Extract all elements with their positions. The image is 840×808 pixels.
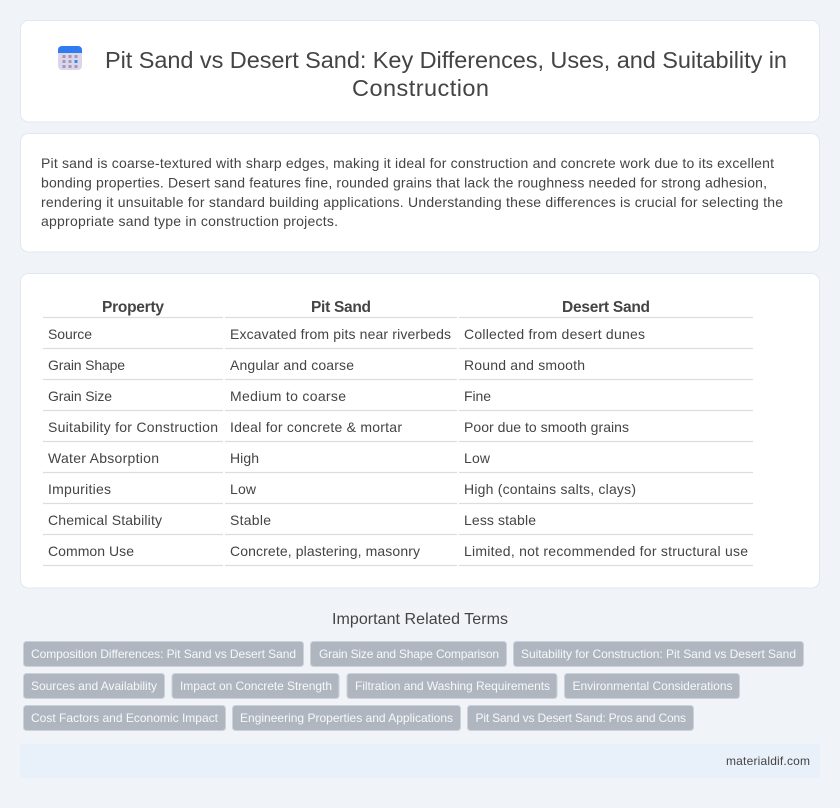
heading: important related terms: Important Related Terms <box>332 611 508 628</box>
panel: introduction text: rendering it unsuitable for standard building applications. Understanding these differences is crucial for selecting the <box>41 194 783 210</box>
panel: comparison table <box>20 274 820 588</box>
related term tags: Grain Size and Shape Comparison <box>319 647 499 661</box>
row: suitability: Ideal for concrete & mortar <box>230 419 402 435</box>
row: grain size <box>48 388 491 404</box>
related term tags: Suitability for Construction: Pit Sand vs Desert Sand <box>521 647 796 661</box>
row: common use: Concrete, plastering, masonry <box>230 543 420 559</box>
table header: Property <box>102 299 164 316</box>
title: Construction <box>352 75 489 101</box>
related term tags <box>24 642 804 730</box>
related term tags: Engineering Properties and Applications <box>240 711 453 725</box>
row: source: Collected from desert dunes <box>464 326 645 342</box>
row: impurities: High (contains salts, clays) <box>464 481 636 497</box>
row: grain size: Fine <box>464 388 491 404</box>
row: chemical stability: Less stable <box>464 512 536 528</box>
title: Pit Sand vs Desert Sand: Key Differences, Uses, and Suitability in <box>105 47 787 73</box>
panel: introduction text: bonding properties. Desert sand features fine, rounded grains that lack the roughness needed for strong adhesion, <box>41 174 767 190</box>
row: grain shape: Angular and coarse <box>230 357 354 373</box>
row: grain shape <box>48 357 585 373</box>
related term tags: Sources and Availability <box>31 679 157 693</box>
footer <box>20 744 820 778</box>
footer: materialdif.com <box>726 754 810 768</box>
table header <box>102 299 650 316</box>
title <box>105 47 787 101</box>
row: water absorption: Water Absorption <box>48 450 159 466</box>
row: source: Source <box>48 326 92 342</box>
row: grain size: Medium to coarse <box>230 388 346 404</box>
row: impurities <box>48 481 636 497</box>
related term tags: Filtration and Washing Requirements <box>355 679 550 693</box>
row: source <box>48 326 645 342</box>
row: suitability: Suitability for Construction <box>48 419 218 435</box>
row: suitability: Poor due to smooth grains <box>464 419 629 435</box>
related term tags: Pit Sand vs Desert Sand: Pros and Cons <box>476 711 686 725</box>
related term tags: Impact on Concrete Strength <box>180 679 332 693</box>
row: impurities: Low <box>230 481 257 497</box>
panel: introduction text: Pit sand is coarse-textured with sharp edges, making it ideal for construction and concrete work due to its excellent <box>41 155 774 171</box>
row: water absorption <box>48 450 491 466</box>
row: grain shape: Round and smooth <box>464 357 585 373</box>
row: chemical stability: Stable <box>230 512 271 528</box>
row: source: Excavated from pits near riverbeds <box>230 326 451 342</box>
table header: Pit Sand <box>311 299 371 316</box>
header panel <box>20 20 820 122</box>
row: common use: Common Use <box>48 543 134 559</box>
row: suitability <box>48 419 629 435</box>
related term tags: Environmental Considerations <box>572 679 732 693</box>
row: grain size: Grain Size <box>48 388 112 404</box>
row: common use: Limited, not recommended for structural use <box>464 543 748 559</box>
row: water absorption: Low <box>464 450 491 466</box>
icon: calendar <box>58 46 82 70</box>
related term tags: Cost Factors and Economic Impact <box>31 711 219 725</box>
row: grain shape: Grain Shape <box>48 357 125 373</box>
table header: Desert Sand <box>562 299 650 316</box>
panel: introduction text <box>20 134 820 252</box>
row: impurities: Impurities <box>48 481 111 497</box>
row: common use <box>48 543 748 559</box>
row: water absorption: High <box>230 450 259 466</box>
related term tags: Composition Differences: Pit Sand vs Desert Sand <box>31 647 296 661</box>
panel: introduction text: appropriate sand type in construction projects. <box>41 213 338 229</box>
row: chemical stability: Chemical Stability <box>48 512 162 528</box>
row: chemical stability <box>48 512 536 528</box>
